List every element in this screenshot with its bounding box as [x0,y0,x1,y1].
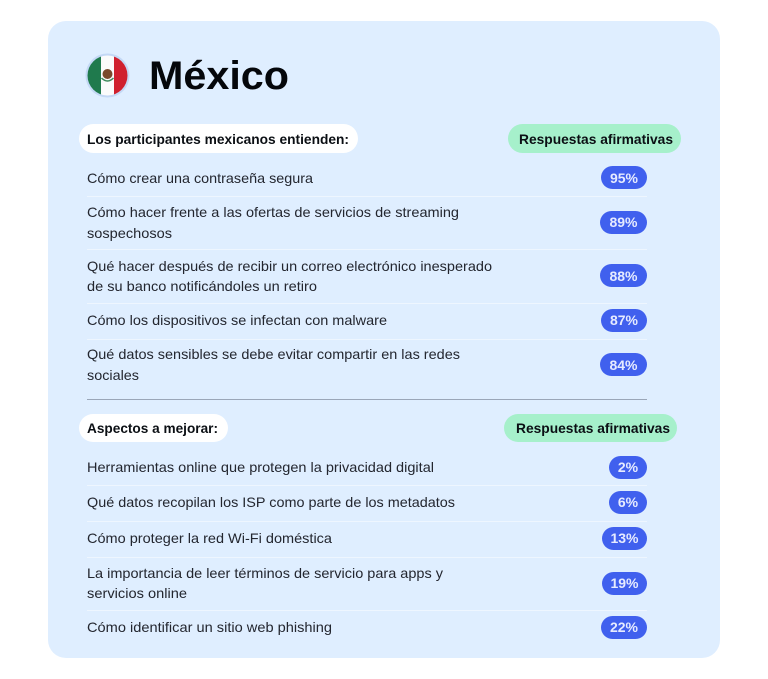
row: redes sociales [87,346,647,383]
section heading: understood topics: Los participantes mexicanos entienden: [87,131,349,147]
row: red Wi-Fi: Cómo proteger la red Wi-Fi doméstica [87,530,332,546]
row: ISP metadatos: Qué datos recopilan los ISP como parte de los metadatos [87,494,455,510]
row: red Wi-Fi: 13% [610,530,639,546]
row: privacidad digital [87,456,647,479]
row: contraseña segura: 95% [610,170,639,186]
row: privacidad digital: 2% [618,459,639,475]
column heading: affirmative answers [504,414,677,442]
column heading: affirmative answers: Respuestas afirmativas [516,420,670,436]
row: servicios de streaming [87,204,647,241]
section heading: areas to improve [79,414,228,442]
column heading: affirmative answers: Respuestas afirmativas [519,131,673,147]
row: servicios de streaming: Cómo hacer frente a las ofertas de servicios de streaming [87,204,459,220]
row: sitio web phishing: Cómo identificar un sitio web phishing [87,619,332,635]
row: términos de servicio: 19% [610,575,639,591]
row: privacidad digital: Herramientas online que protegen la privacidad digital [87,459,434,475]
row: malware [87,309,647,332]
row: servicios de streaming: sospechosos [87,225,172,241]
row: ISP metadatos [87,491,647,514]
row: correo del banco: de su banco notificándoles un retiro [87,278,317,294]
row: servicios de streaming: 89% [609,214,638,230]
title: México [149,54,289,98]
row: redes sociales: Qué datos sensibles se debe evitar compartir en las redes [87,346,460,362]
row: términos de servicio [87,565,647,601]
row: sitio web phishing [87,616,647,639]
row: contraseña segura: Cómo crear una contraseña segura [87,170,313,186]
row: malware: Cómo los dispositivos se infectan con malware [87,312,387,328]
row: correo del banco [87,258,647,294]
row: red Wi-Fi [87,527,647,550]
row: correo del banco: 88% [609,268,638,284]
row: redes sociales: 84% [609,357,638,373]
row: contraseña segura [87,166,647,189]
row: correo del banco: Qué hacer después de recibir un correo electrónico inesperado [87,258,492,274]
row: términos de servicio: La importancia de leer términos de servicio para apps y [87,565,443,581]
section heading: understood topics [79,124,358,153]
row: malware: 87% [610,312,639,328]
icon: Mexican flag [86,54,130,98]
section heading: areas to improve: Aspectos a mejorar: [87,420,218,436]
row: términos de servicio: servicios online [87,585,187,601]
column heading: affirmative answers [508,124,681,153]
row: sitio web phishing: 22% [610,619,639,635]
row: ISP metadatos: 6% [618,494,639,510]
row: redes sociales: sociales [87,367,139,383]
